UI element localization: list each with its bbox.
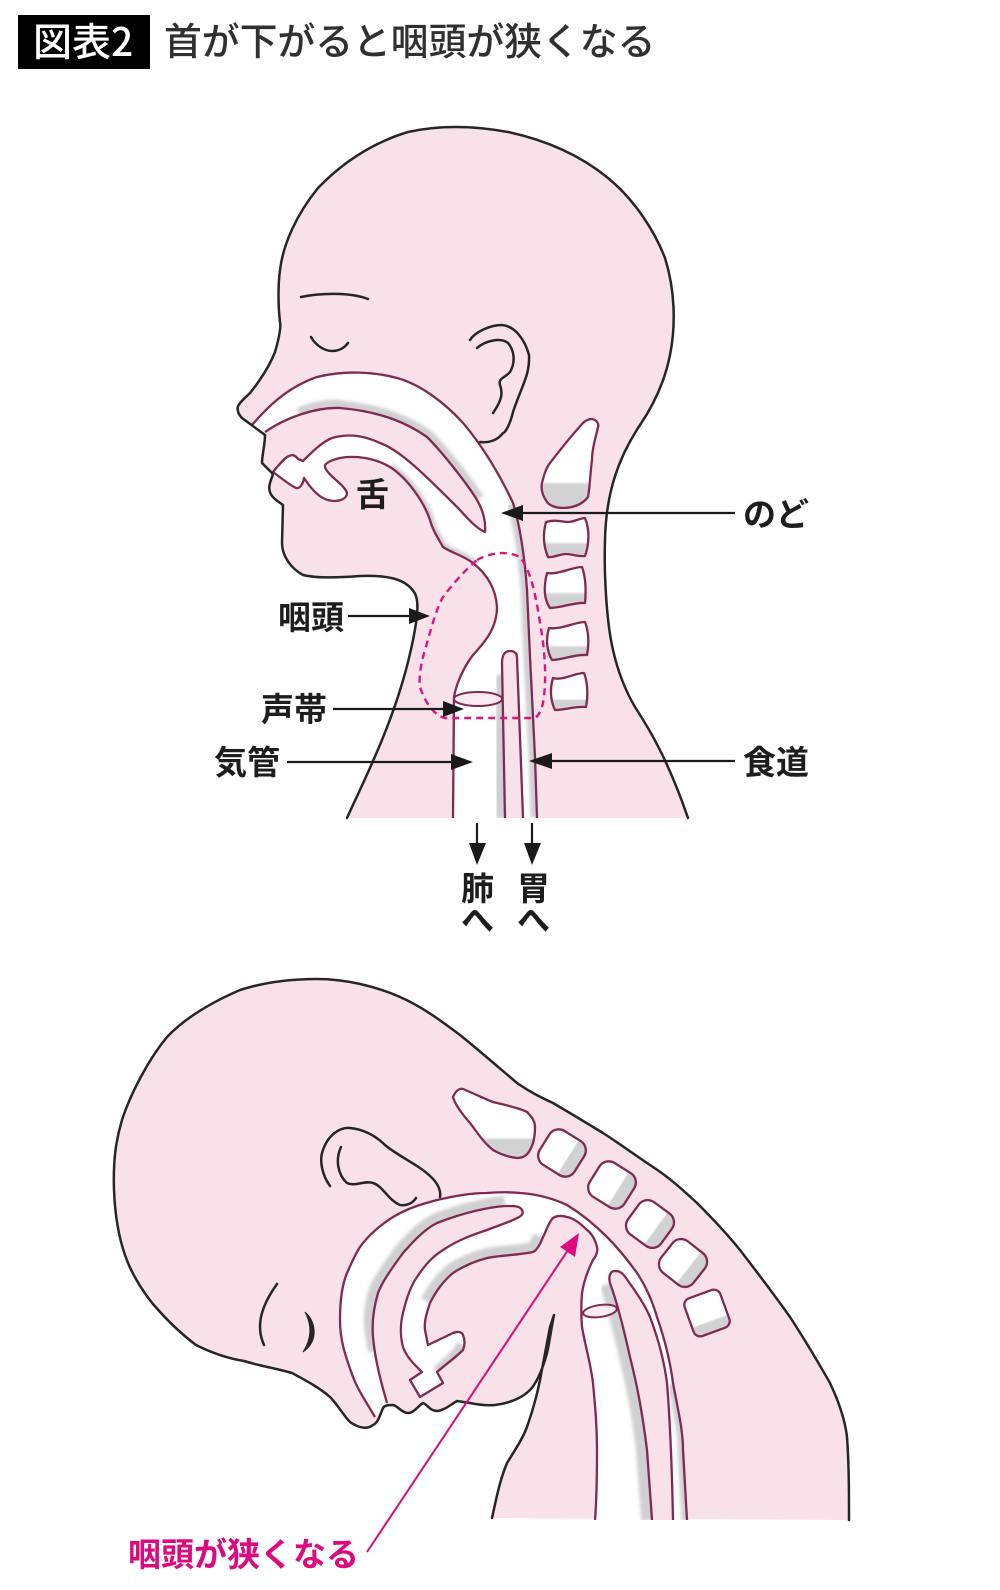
outline (114, 979, 849, 1520)
airway shading (300, 407, 537, 818)
vertebrae (542, 419, 598, 710)
esophagus (502, 651, 523, 818)
label: esophagus: 食道 (743, 736, 809, 784)
vertebrae (453, 1089, 732, 1338)
label: to lungs (461, 862, 494, 942)
label: trachea: 気管 (214, 736, 280, 784)
arrow: esophagus (529, 753, 735, 769)
ear (321, 1128, 440, 1205)
arrow: trachea (287, 754, 473, 770)
arrow: pharynx (348, 608, 430, 624)
vocal cords (582, 1303, 618, 1319)
label: throat: のど (743, 488, 809, 536)
diagram: upright head cross-section (238, 127, 735, 865)
title (18, 11, 655, 69)
vocal cords (454, 692, 502, 706)
label: tongue: 舌 (356, 468, 389, 516)
airway walls (340, 1192, 687, 1520)
arrow: to stomach (524, 823, 541, 865)
airway walls (252, 373, 537, 818)
airway cavity (252, 373, 537, 818)
figure badge: 図表2 (33, 12, 133, 68)
heading text: 首が下がると咽頭が狭くなる (164, 11, 655, 66)
label: to lungs: へ (461, 894, 494, 942)
label: to lungs: 肺 (461, 862, 494, 910)
closed eye (303, 1312, 314, 1352)
label: to stomach: 胃 (517, 862, 550, 910)
label: vocal cords: 声帯 (261, 683, 327, 731)
head and neck fill (238, 127, 688, 818)
closed eye (311, 337, 348, 351)
airway shading (374, 1206, 687, 1520)
airway cavity (340, 1192, 687, 1520)
eyebrow (260, 1284, 277, 1345)
label: to stomach (517, 862, 550, 942)
outline (238, 127, 688, 818)
callout arrow: narrowed pharynx (367, 1233, 579, 1552)
head and neck fill (114, 979, 849, 1520)
diagram: bowed head cross-section (114, 979, 849, 1552)
label: to stomach: へ (517, 894, 550, 942)
callout label: pharynx narrows: 咽頭が狭くなる (128, 1528, 359, 1576)
ear (470, 325, 529, 442)
esophagus (609, 1271, 673, 1520)
arrow: vocal cords (333, 701, 464, 717)
arrow: throat (501, 505, 735, 521)
label: pharynx: 咽頭 (278, 591, 344, 639)
dashed pharynx outline (420, 553, 545, 718)
arrow: to lungs (469, 823, 486, 865)
eyebrow (301, 294, 368, 299)
